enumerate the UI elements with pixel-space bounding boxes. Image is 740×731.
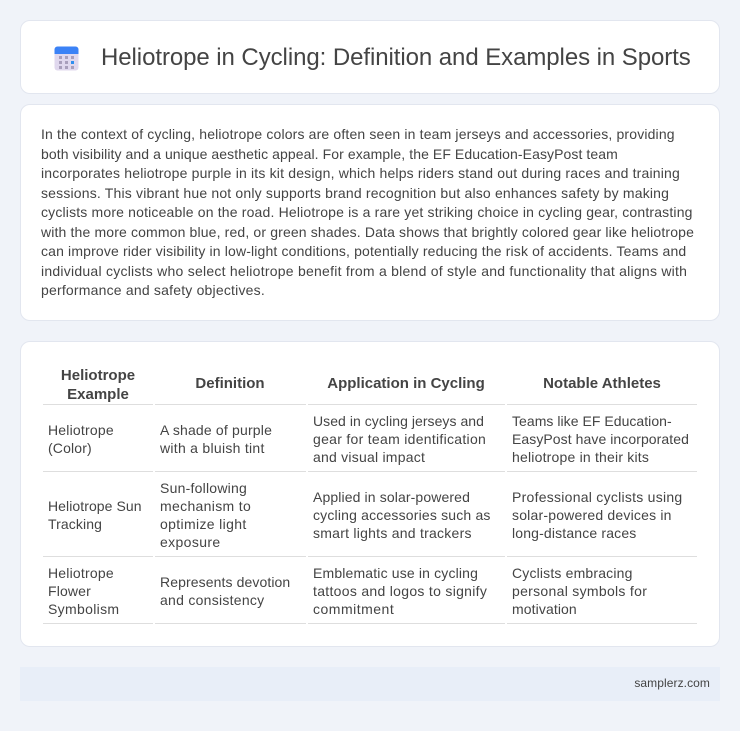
row 3, col 4: Cyclists embracing [512,565,633,581]
row 3, col 1: Flower [48,583,91,599]
row 2, col 2: Sun-following [160,480,247,496]
header: col 3: Application in Cycling [327,375,485,392]
row 2, col 3: smart lights and trackers [313,525,472,541]
row 3, col 2: Represents devotion [160,574,290,590]
row 3, col 4 [512,565,647,617]
row 1, col 4: heliotrope in their kits [512,449,649,465]
row 1, col 1: (Color) [48,440,92,456]
row 2, col 2: mechanism to [160,498,251,514]
row 3, col 3: commitment [313,601,394,617]
text block: intro: with the more common blue, red, or green shades. Data shows that brightly colored gear like heliotrope [41,224,694,240]
row 2, col 1: Tracking [48,516,102,532]
row 1, col 1: Heliotrope [48,422,114,438]
row 2, col 3 [313,489,491,541]
row 2, col 4 [512,489,682,541]
row 2, col 2: exposure [160,534,221,550]
panel: table [20,341,720,647]
row 3, col 2: and consistency [160,592,264,608]
row 3, col 1 [48,565,119,617]
row 2, col 1 [48,498,142,532]
row 2, col 4: long-distance races [512,525,636,541]
row 3, col 3: tattoos and logos to signify [313,583,487,599]
row 1, col 3: Used in cycling jerseys and [313,413,484,429]
text block: intro: cyclists more noticeable on the road. Heliotrope is a rare yet striking choice in cycling gear, contrasting [41,204,693,220]
header: col 1 [61,367,135,403]
text block: intro: both visibility and a unique aesthetic appeal. For example, the EF Education-EasyPost team [41,146,618,162]
row 1, col 4: Teams like EF Education- [512,413,672,429]
text block: intro: performance and safety objectives. [41,282,265,298]
row 3, col 1: Symbolism [48,601,119,617]
row 3, col 2 [160,574,290,608]
row 1, col 4 [512,413,689,465]
row 1, col 4: EasyPost have incorporated [512,431,689,447]
row 1, col 2: with a bluish tint [160,440,265,456]
icon: calendar [54,46,78,70]
header: col 1: Example [67,386,129,403]
row 2, col 1: Heliotrope Sun [48,498,142,514]
footer text: samplerz.com [634,676,710,690]
text block: intro: individual cyclists who select heliotrope benefit from a blend of style and functionality that aligns with [41,262,687,278]
header: col 2: Definition [195,375,265,392]
text block: intro: In the context of cycling, heliotrope colors are often seen in team jerseys and accessories, providing [41,126,675,142]
row 2, col 2: optimize light [160,516,247,532]
header: col 1: Heliotrope [61,367,135,384]
text block: intro: can improve rider visibility in low-light conditions, potentially reducing the risk of accidents. Teams and [41,243,686,259]
row 2, col 2 [160,480,251,550]
row 2, col 4: solar-powered devices in [512,507,672,523]
row 1, col 1 [48,422,114,456]
text block: intro: sessions. This vibrant hue not only supports brand recognition but also enhances safety by making [41,184,669,200]
row 3, col 4: motivation [512,601,577,617]
row 1, col 3: gear for team identification [313,431,486,447]
row 2, col 3: cycling accessories such as [313,507,491,523]
row 1, col 3 [313,413,486,465]
row 1, col 2 [160,422,272,456]
footer bar [20,667,720,701]
title: Heliotrope in Cycling: Definition and Examples in Sports [101,44,691,71]
row 3, col 3: Emblematic use in cycling [313,565,478,581]
row 1, col 3: and visual impact [313,449,425,465]
row 2, col 4: Professional cyclists using [512,489,682,505]
row 2, col 3: Applied in solar-powered [313,489,470,505]
row 1, col 2: A shade of purple [160,422,272,438]
panel: title card [20,20,720,94]
row 3, col 1: Heliotrope [48,565,114,581]
text block: intro [41,126,694,298]
text block: intro: incorporates heliotrope purple in its kit design, which helps riders stand out during races and training [41,165,680,181]
panel: intro paragraph [20,104,720,321]
row 3, col 3 [313,565,487,617]
row 3, col 4: personal symbols for [512,583,647,599]
header: col 4: Notable Athletes [543,375,661,392]
